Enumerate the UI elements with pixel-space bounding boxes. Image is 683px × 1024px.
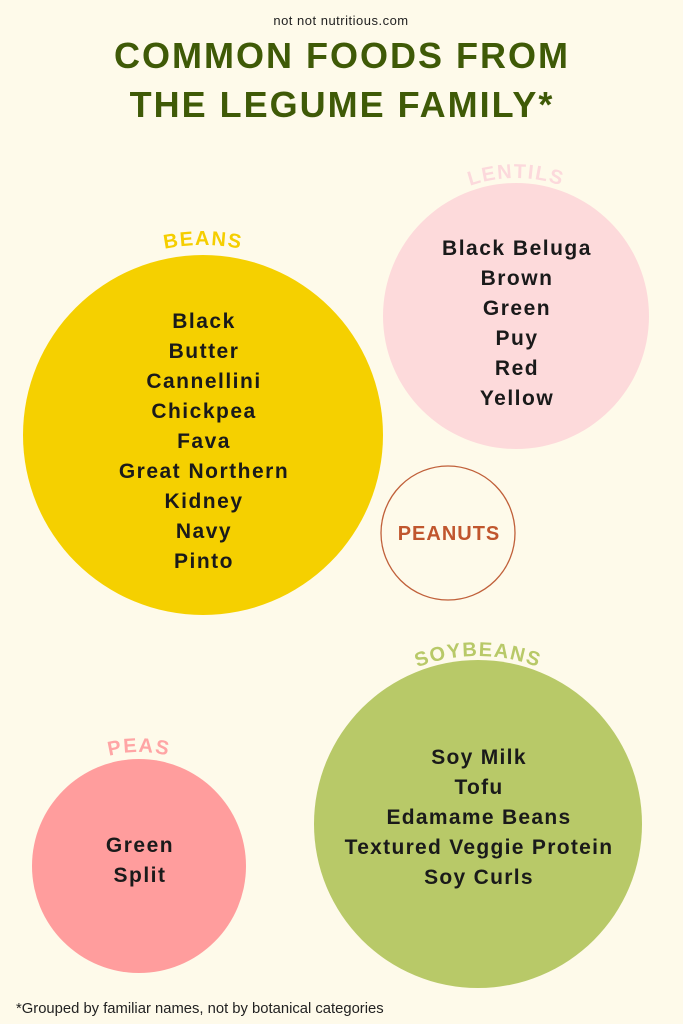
- list: peas: Split: [114, 864, 166, 887]
- list: beans: Navy: [176, 520, 232, 543]
- label: beans: BEANS: [164, 231, 241, 248]
- panel: peanuts: PEANUTS: [398, 523, 500, 545]
- panel: lentils: [383, 164, 649, 449]
- list: beans: Pinto: [174, 550, 234, 573]
- panel: soybeans: [314, 642, 642, 988]
- list: lentils: Black Beluga: [442, 237, 592, 260]
- list: soybeans: Textured Veggie Protein: [345, 836, 613, 859]
- label: lentils: LENTILS: [467, 164, 562, 186]
- list: soybeans: Soy Milk: [431, 746, 527, 769]
- list: lentils: Puy: [495, 327, 539, 350]
- list: peas: [106, 834, 174, 887]
- list: lentils: [442, 237, 592, 410]
- list: beans: Fava: [177, 430, 231, 453]
- panel: peas: [32, 738, 246, 973]
- title: THE LEGUME FAMILY*: [130, 84, 554, 125]
- title: [114, 35, 570, 125]
- label: soybeans: SOYBEANS: [415, 642, 540, 666]
- list: soybeans: [345, 746, 613, 889]
- list: beans: Great Northern: [119, 460, 289, 483]
- list: soybeans: Tofu: [454, 776, 504, 799]
- list: beans: Black: [172, 310, 236, 333]
- list: lentils: Brown: [481, 267, 553, 290]
- list: beans: Chickpea: [151, 400, 257, 423]
- list: beans: Cannellini: [146, 370, 262, 393]
- panel: beans: [23, 231, 383, 615]
- panel: peanuts: [381, 466, 515, 600]
- list: lentils: Yellow: [480, 387, 554, 410]
- title: COMMON FOODS FROM: [114, 35, 570, 76]
- list: beans: Kidney: [164, 490, 244, 513]
- footnote: *Grouped by familiar names, not by botanical categories: [16, 1001, 384, 1017]
- site credit: not not nutritious.com: [273, 13, 409, 28]
- list: peas: Green: [106, 834, 174, 857]
- list: beans: [119, 310, 289, 573]
- list: soybeans: Soy Curls: [424, 866, 534, 889]
- label: peas: PEAS: [108, 738, 168, 756]
- list: lentils: Green: [483, 297, 551, 320]
- list: soybeans: Edamame Beans: [387, 806, 571, 829]
- list: beans: Butter: [169, 340, 239, 363]
- list: lentils: Red: [495, 357, 539, 380]
